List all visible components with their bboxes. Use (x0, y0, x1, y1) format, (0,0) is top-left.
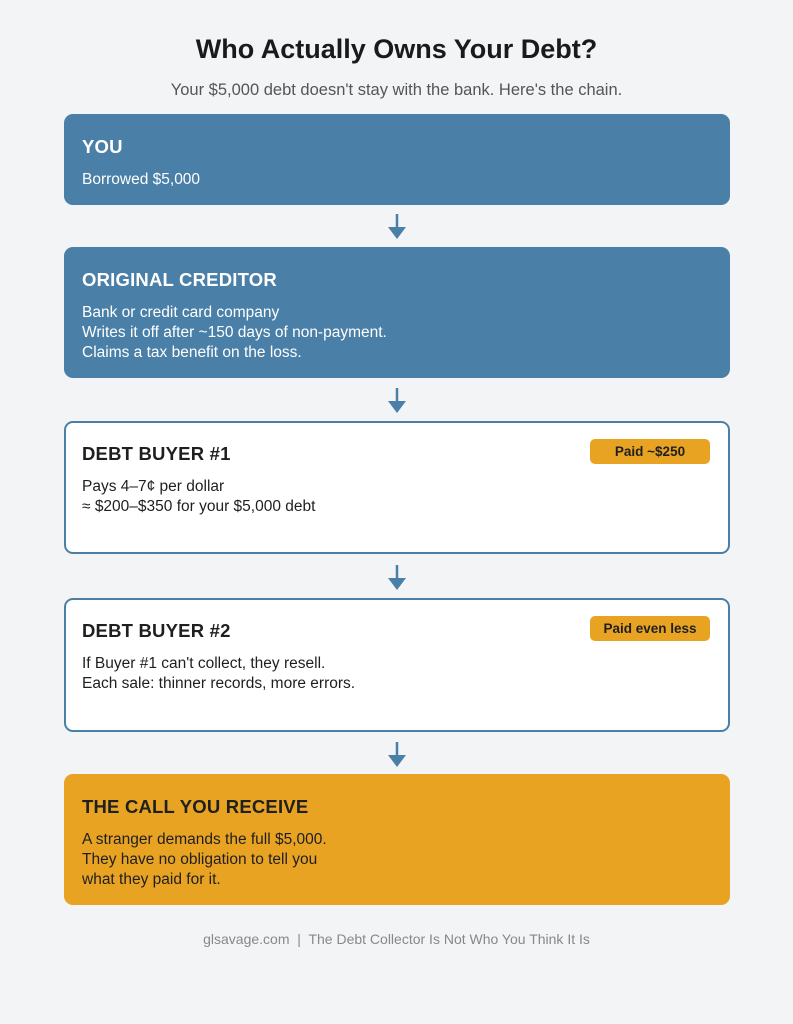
panel: you: Borrowed $5,000 (82, 171, 200, 188)
panel: original creditor (64, 247, 730, 378)
panel: original creditor: ORIGINAL CREDITOR (82, 269, 277, 290)
badge: paid even less: Paid even less (603, 621, 697, 636)
panel: the call you receive: THE CALL YOU RECEIVE (82, 796, 308, 817)
panel: debt buyer 2: If Buyer #1 can't collect, they resell. (82, 655, 325, 672)
panel: original creditor: Writes it off after ~150 days of non-payment. (82, 324, 387, 341)
panel: you: YOU (82, 136, 123, 157)
arrow 4 (388, 742, 406, 767)
panel: original creditor: Claims a tax benefit on the loss. (82, 344, 302, 361)
badge: paid ~$250 (590, 439, 710, 464)
panel: debt buyer 1 (64, 421, 730, 554)
subtitle: Your $5,000 debt doesn't stay with the bank. Here's the chain. (171, 81, 622, 99)
panel: debt buyer 1: DEBT BUYER #1 (82, 443, 231, 464)
panel: debt buyer 2 (64, 598, 730, 732)
arrow 3 (388, 565, 406, 590)
panel: you (64, 114, 730, 205)
panel: debt buyer 1: ≈ $200–$350 for your $5,000 debt (82, 498, 315, 515)
arrow 2 (388, 388, 406, 413)
badge: paid ~$250: Paid ~$250 (615, 444, 685, 459)
panel: debt buyer 1: Pays 4–7¢ per dollar (82, 478, 224, 495)
badge: paid even less (590, 616, 710, 641)
panel: the call you receive: A stranger demands the full $5,000. (82, 831, 327, 848)
panel: the call you receive: what they paid for it. (82, 871, 221, 888)
panel: debt buyer 2: Each sale: thinner records, more errors. (82, 675, 355, 692)
panel: original creditor: Bank or credit card company (82, 304, 279, 321)
panel: debt buyer 2: DEBT BUYER #2 (82, 620, 231, 641)
title: Who Actually Owns Your Debt? (196, 34, 597, 64)
footer: glsavage.com | The Debt Collector Is Not Who You Think It Is (203, 931, 590, 947)
panel: the call you receive: They have no obligation to tell you (82, 851, 317, 868)
panel: the call you receive (64, 774, 730, 905)
arrow 1 (388, 214, 406, 239)
